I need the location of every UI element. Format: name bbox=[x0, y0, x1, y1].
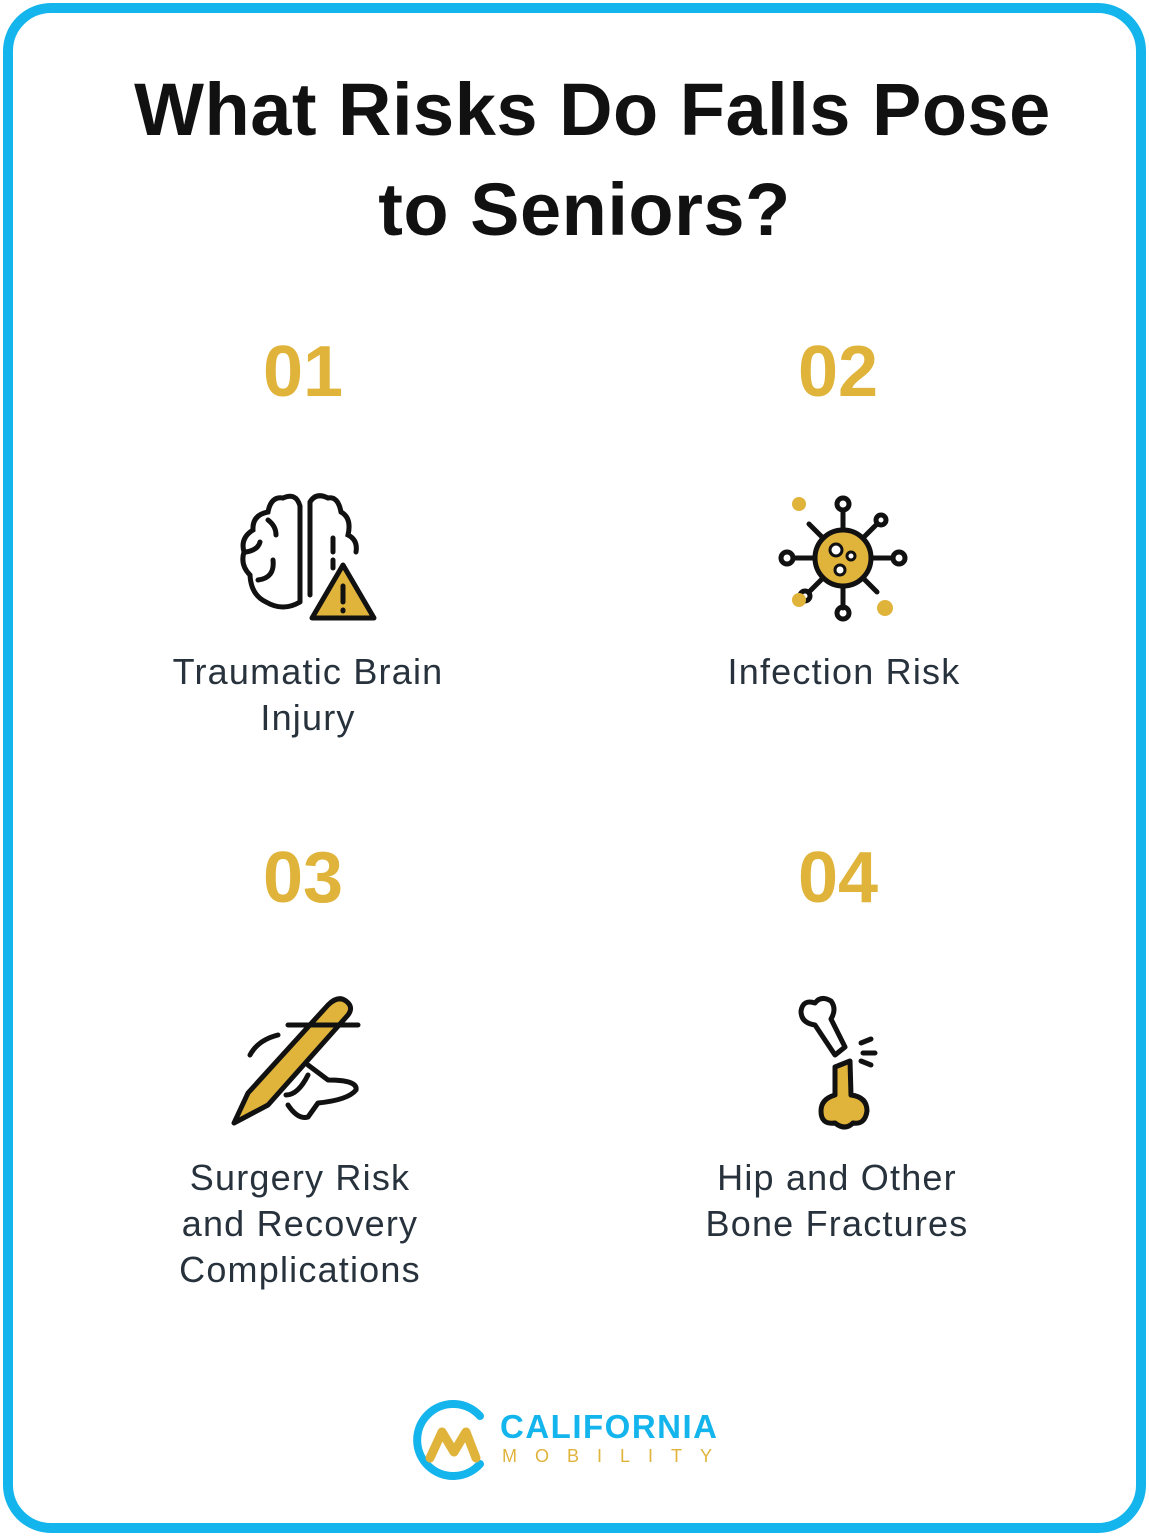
number 01: 01 bbox=[263, 332, 343, 412]
label: brain injury bbox=[173, 651, 443, 738]
icon: virus bbox=[778, 496, 908, 622]
label: surgery: and Recovery bbox=[182, 1203, 418, 1244]
title: What Risks Do Falls Pose bbox=[134, 68, 1051, 151]
label: infection: Infection Risk bbox=[728, 651, 960, 692]
number 04: 04 bbox=[798, 838, 878, 918]
label: fractures: Bone Fractures bbox=[706, 1203, 968, 1244]
label: surgery: Complications bbox=[179, 1249, 421, 1290]
title: to Seniors? bbox=[378, 168, 791, 251]
logo: MOBILITY bbox=[502, 1446, 730, 1466]
icon: broken bone bbox=[798, 996, 878, 1130]
label: surgery: Surgery Risk bbox=[190, 1157, 410, 1198]
label: brain injury: Injury bbox=[260, 697, 356, 738]
icon: brain warning bbox=[240, 493, 376, 620]
logo: CALIFORNIA bbox=[500, 1408, 718, 1445]
label: brain injury: Traumatic Brain bbox=[173, 651, 443, 692]
logo bbox=[413, 1400, 730, 1480]
title bbox=[134, 68, 1051, 251]
label: fractures bbox=[706, 1157, 968, 1244]
label: surgery bbox=[179, 1157, 421, 1290]
label: fractures: Hip and Other bbox=[717, 1157, 957, 1198]
number 03: 03 bbox=[263, 838, 343, 918]
icon: scalpel hand bbox=[232, 996, 360, 1126]
number 02: 02 bbox=[798, 332, 878, 412]
